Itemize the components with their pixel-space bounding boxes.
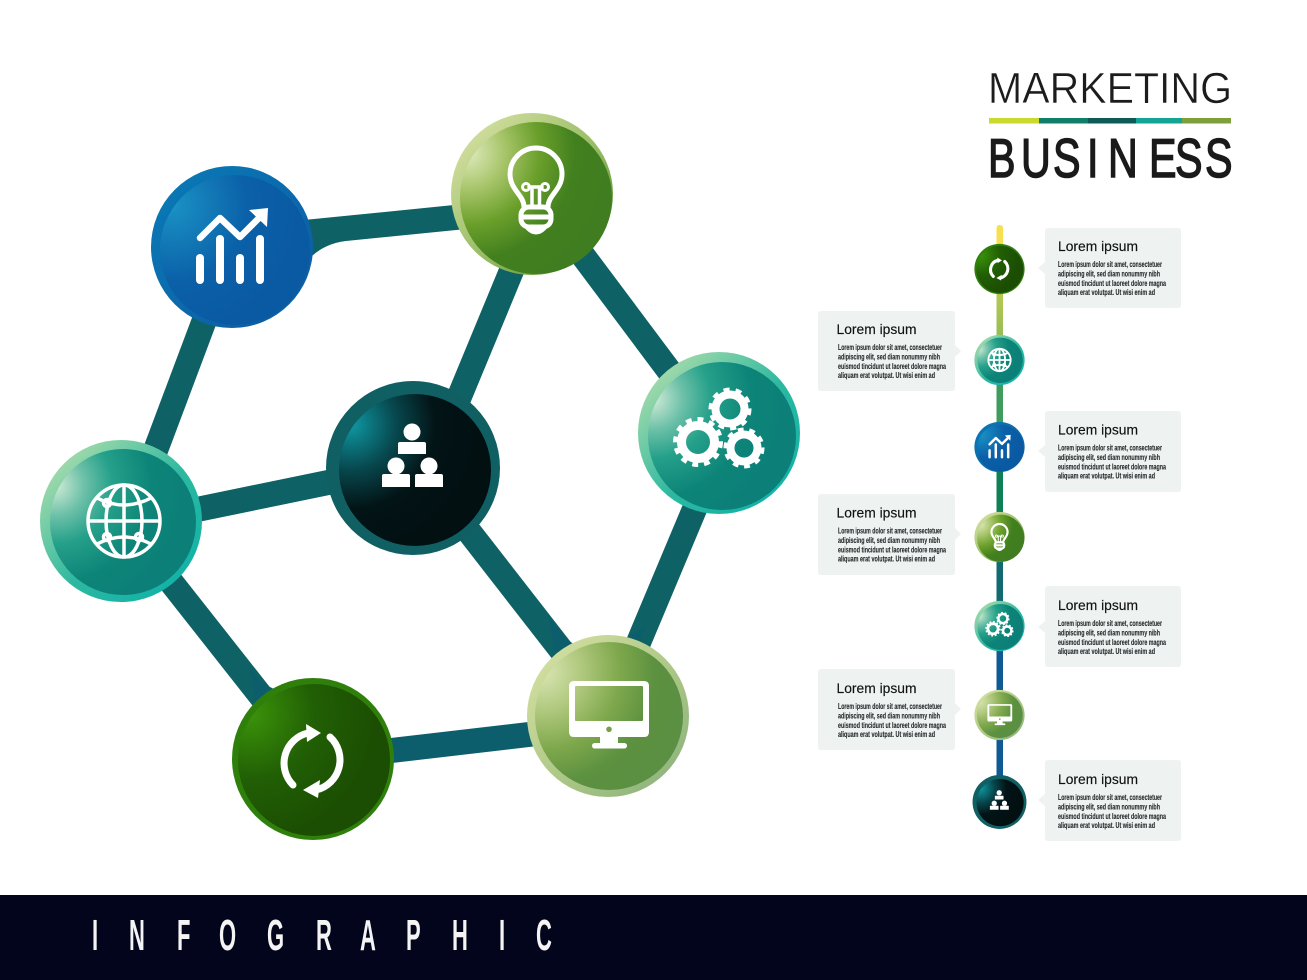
callout: right 3: aliquam erat volutpat. Ut wisi enim ad <box>1058 646 1155 656</box>
callout: left 2: adipiscing elit, sed diam nonummy nibh <box>838 535 940 545</box>
callout: right 4: Lorem ipsum dolor sit amet, consectetuer <box>1058 792 1162 802</box>
callout: left 1: Lorem ipsum <box>836 321 916 337</box>
callout: right 3: Lorem ipsum <box>1058 597 1138 613</box>
callout: right 1: Lorem ipsum <box>1058 238 1138 254</box>
callout: right 4 <box>1038 760 1181 841</box>
callout: right 3: adipiscing elit, sed diam nonummy nibh <box>1058 628 1160 638</box>
title: marketing: MARKETING <box>988 64 1232 113</box>
callout: right 4: euismod tincidunt ut laoreet dolore magna <box>1058 811 1166 821</box>
callout: left 1: Lorem ipsum dolor sit amet, consectetuer <box>838 342 942 352</box>
node: bulb <box>451 113 613 275</box>
callout: right 2: adipiscing elit, sed diam nonummy nibh <box>1058 452 1160 462</box>
callout: right 1: adipiscing elit, sed diam nonummy nibh <box>1058 268 1160 278</box>
footer band <box>0 895 1307 980</box>
timeline node: globe <box>974 335 1025 385</box>
callout: right 3: euismod tincidunt ut laoreet dolore magna <box>1058 637 1166 647</box>
callout: left 3: aliquam erat volutpat. Ut wisi enim ad <box>838 729 935 739</box>
node: gears <box>638 352 800 514</box>
callout: right 4: aliquam erat volutpat. Ut wisi enim ad <box>1058 820 1155 830</box>
callout: right 1: euismod tincidunt ut laoreet dolore magna <box>1058 278 1166 288</box>
callout: left 3 <box>818 669 961 750</box>
timeline node: refresh <box>974 244 1025 294</box>
callout: left 2: aliquam erat volutpat. Ut wisi enim ad <box>838 554 935 564</box>
timeline node: monitor <box>974 690 1025 740</box>
node: refresh <box>232 678 394 840</box>
timeline line <box>996 225 1003 780</box>
callout: left 3: Lorem ipsum <box>836 680 916 696</box>
node: monitor <box>527 635 689 797</box>
node: people <box>326 381 500 555</box>
callout: left 1 <box>818 311 961 391</box>
callout: left 2: euismod tincidunt ut laoreet dolore magna <box>838 544 946 554</box>
callout: right 2: Lorem ipsum <box>1058 422 1138 438</box>
callout: right 3 <box>1038 586 1181 667</box>
callout: left 3: euismod tincidunt ut laoreet dolore magna <box>838 720 946 730</box>
network connectors <box>150 216 700 753</box>
callout: left 3: Lorem ipsum dolor sit amet, consectetuer <box>838 701 942 711</box>
callout: left 1: aliquam erat volutpat. Ut wisi enim ad <box>838 370 935 380</box>
callout: left 1: euismod tincidunt ut laoreet dolore magna <box>838 361 946 371</box>
callout: left 2 <box>818 494 961 575</box>
callout: right 2: aliquam erat volutpat. Ut wisi enim ad <box>1058 470 1155 480</box>
callout: right 4: adipiscing elit, sed diam nonummy nibh <box>1058 802 1160 812</box>
callout: left 1: adipiscing elit, sed diam nonummy nibh <box>838 352 940 362</box>
title <box>988 64 1233 189</box>
callout: right 2 <box>1038 411 1181 492</box>
node: chart <box>151 166 313 328</box>
callout: right 2: Lorem ipsum dolor sit amet, consectetuer <box>1058 442 1162 452</box>
callout: right 3: Lorem ipsum dolor sit amet, consectetuer <box>1058 618 1162 628</box>
callout: right 2: euismod tincidunt ut laoreet dolore magna <box>1058 462 1166 472</box>
title: colour bar <box>989 118 1231 124</box>
callout: left 2: Lorem ipsum dolor sit amet, consectetuer <box>838 526 942 536</box>
callout: left 2: Lorem ipsum <box>836 504 916 520</box>
footer text: INFOGRAPHIC <box>92 912 552 960</box>
callout: right 4: Lorem ipsum <box>1058 771 1138 787</box>
callout: right 1: aliquam erat volutpat. Ut wisi enim ad <box>1058 287 1155 297</box>
timeline node: people <box>973 775 1026 829</box>
timeline node: chart <box>974 422 1025 472</box>
callout: right 1 <box>1038 228 1181 308</box>
callout: left 3: adipiscing elit, sed diam nonummy nibh <box>838 710 940 720</box>
callout: right 1: Lorem ipsum dolor sit amet, consectetuer <box>1058 259 1162 269</box>
node: globe <box>40 440 202 602</box>
timeline node: bulb <box>974 512 1025 562</box>
timeline node: gears <box>974 601 1025 651</box>
title: business: BUSINESS <box>988 128 1233 189</box>
